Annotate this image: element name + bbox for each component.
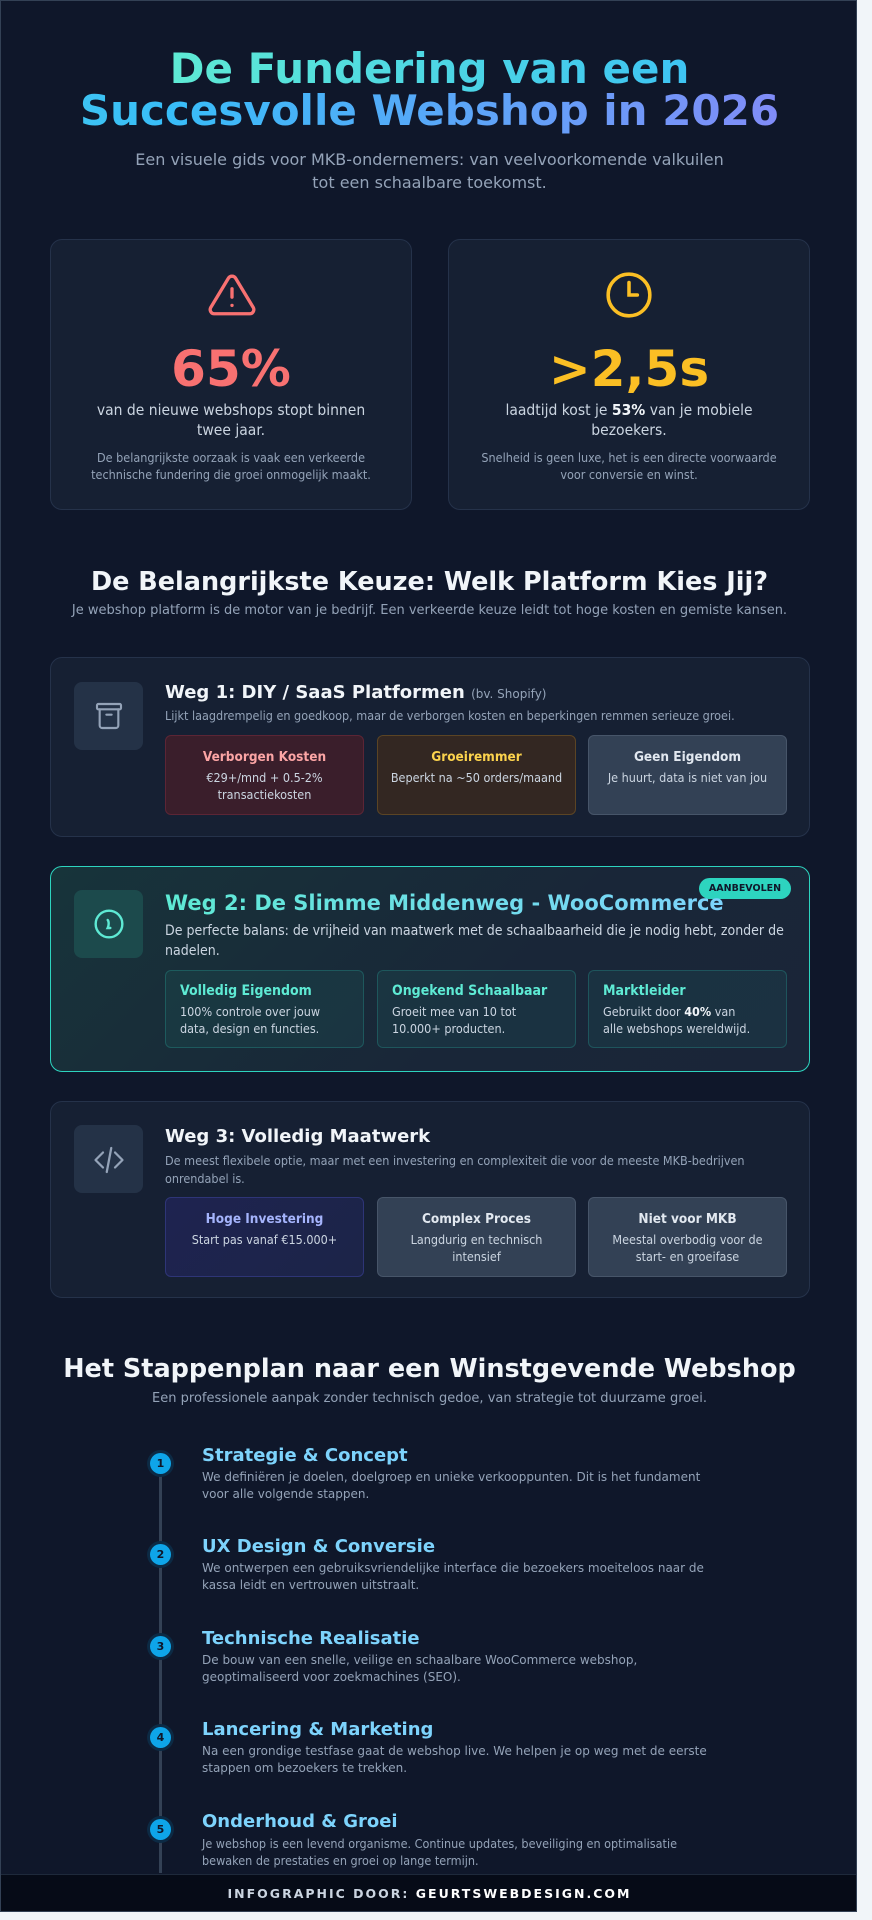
step 4: 4 (157, 1731, 164, 1744)
box: schaalbaar (377, 970, 576, 1048)
subheading: Je webshop platform is de motor van je bedrijf. Een verkeerde keuze leidt tot hoge kosten en gemiste kansen. (72, 603, 787, 618)
footer: INFOGRAPHIC DOOR: GEURTSWEBDESIGN.COM (228, 1886, 631, 1901)
step 3: 3 (157, 1640, 164, 1653)
step 4: Na een grondige testfase gaat de webshop live. We helpen je op weg met de eerste stappen om bezoekers te trekken. (202, 1744, 707, 1775)
title: De Fundering van een (170, 44, 689, 93)
box: groeiremmer: Groeiremmer (431, 749, 522, 765)
step 4: Lancering & Marketing (202, 1719, 433, 1740)
box: hoge investering: Hoge Investering (206, 1211, 323, 1227)
box: marktleider: Gebruikt door 40% van alle webshops wereldwijd. (603, 1004, 750, 1036)
subheading: Een professionele aanpak zonder technisch gedoe, van strategie tot duurzame groei. (152, 1391, 707, 1406)
box: geen eigendom: Je huurt, data is niet van jou (608, 770, 767, 785)
box: geen eigendom (588, 735, 787, 815)
step 2: UX Design & Conversie (202, 1536, 435, 1557)
box: geen eigendom: Geen Eigendom (634, 749, 741, 765)
step 5: Je webshop is een levend organisme. Continue updates, beveiliging en optimalisatie bewaken de prestaties en groei op lange termijn. (202, 1836, 677, 1868)
step 3: De bouw van een snelle, veilige en schaalbare WooCommerce webshop, geoptimaliseerd voor zoekmachines (SEO). (202, 1653, 637, 1684)
box: verborgen kosten (165, 735, 364, 815)
stat card: 2,5s (448, 239, 810, 510)
text: laadtijd kost je 53% van je mobiele bezoekers. (505, 401, 753, 439)
title: Succesvolle Webshop in 2026 (80, 86, 779, 135)
note: De belangrijkste oorzaak is vaak een verkeerde technische fundering die groei onmogelijk maakt. (91, 450, 371, 482)
subtitle (135, 150, 724, 192)
step 3 (147, 1628, 637, 1684)
step 1: Strategie & Concept (202, 1445, 408, 1466)
panel: weg 3 (50, 1101, 810, 1298)
desc: De perfecte balans: de vrijheid van maatwerk met de schaalbaarheid die je nodig hebt, zonder de nadelen. (165, 923, 784, 959)
box: volledig eigendom: Volledig Eigendom (180, 983, 312, 999)
step 2: 2 (157, 1548, 164, 1561)
step 4 (147, 1719, 707, 1775)
badge: AANBEVOLEN (709, 883, 781, 894)
title (80, 44, 779, 135)
icon: woo (74, 890, 143, 958)
title: Weg 3: Volledig Maatwerk (165, 1126, 430, 1147)
icon: code (74, 1125, 143, 1193)
desc: De meest flexibele optie, maar met een investering en complexiteit die voor de meeste MKB-bedrijven onrendabel is. (165, 1153, 745, 1186)
box: schaalbaar: Groeit mee van 10 tot 10.000+ producten. (392, 1004, 516, 1036)
box: verborgen kosten: Verborgen Kosten (203, 749, 326, 765)
box: volledig eigendom (165, 970, 364, 1048)
desc: Lijkt laagdrempelig en goedkoop, maar de verborgen kosten en beperkingen remmen serieuze groei. (165, 708, 735, 723)
box: groeiremmer: Beperkt na ~50 orders/maand (391, 770, 562, 785)
box: complex proces: Langdurig en technisch intensief (411, 1232, 542, 1264)
step 5 (147, 1811, 677, 1868)
panel: weg 2 (50, 866, 810, 1072)
icon: clock (606, 272, 652, 318)
box: hoge investering (165, 1197, 364, 1277)
step 2 (147, 1536, 704, 1592)
badge (699, 878, 791, 899)
box: schaalbaar: Ongekend Schaalbaar (392, 983, 547, 999)
step 2: We ontwerpen een gebruiksvriendelijke interface die bezoekers moeiteloos naar de kassa leidt en vertrouwen uitstraalt. (202, 1561, 704, 1592)
icon: archive (74, 682, 143, 750)
box: niet voor mkb: Niet voor MKB (638, 1211, 737, 1227)
step 1: 1 (157, 1457, 164, 1470)
text: van de nieuwe webshops stopt binnen twee jaar. (97, 401, 365, 439)
box: complex proces (377, 1197, 576, 1277)
step 5: 5 (157, 1823, 164, 1836)
box: hoge investering: Start pas vanaf €15.000+ (192, 1232, 337, 1247)
title: Weg 2: De Slimme Middenweg - WooCommerce (165, 891, 724, 915)
step 5: Onderhoud & Groei (202, 1811, 398, 1832)
box: volledig eigendom: 100% controle over jouw data, design en functies. (180, 1004, 320, 1036)
number: >2,5s (549, 340, 709, 398)
timeline (147, 1445, 707, 1873)
box: groeiremmer (377, 735, 576, 815)
subtitle: tot een schaalbare toekomst. (312, 173, 547, 192)
note: Snelheid is geen luxe, het is een directe voorwaarde voor conversie en winst. (481, 450, 777, 482)
box: verborgen kosten: €29+/mnd + 0.5-2% transactiekosten (206, 770, 323, 802)
step 1 (147, 1445, 700, 1501)
box: niet voor mkb (588, 1197, 787, 1277)
subtitle: Een visuele gids voor MKB-ondernemers: van veelvoorkomende valkuilen (135, 150, 724, 169)
stat card: 65% (50, 239, 412, 510)
step 1: We definiëren je doelen, doelgroep en unieke verkooppunten. Dit is het fundament voor alle volgende stappen. (202, 1470, 700, 1501)
title: Weg 1: DIY / SaaS Platformen (bv. Shopify) (165, 682, 546, 703)
footer (1, 1874, 858, 1913)
number: 65% (171, 340, 291, 398)
heading: platform: De Belangrijkste Keuze: Welk Platform Kies Jij? (91, 567, 768, 597)
heading: stappenplan: Het Stappenplan naar een Winstgevende Webshop (63, 1354, 796, 1384)
box: marktleider (588, 970, 787, 1048)
icon: warning (208, 274, 256, 316)
box: complex proces: Complex Proces (422, 1211, 531, 1227)
box: marktleider: Marktleider (603, 983, 686, 999)
panel: weg 1 (50, 657, 810, 837)
box: niet voor mkb: Meestal overbodig voor de start- en groeifase (612, 1232, 763, 1264)
step 3: Technische Realisatie (202, 1628, 420, 1649)
